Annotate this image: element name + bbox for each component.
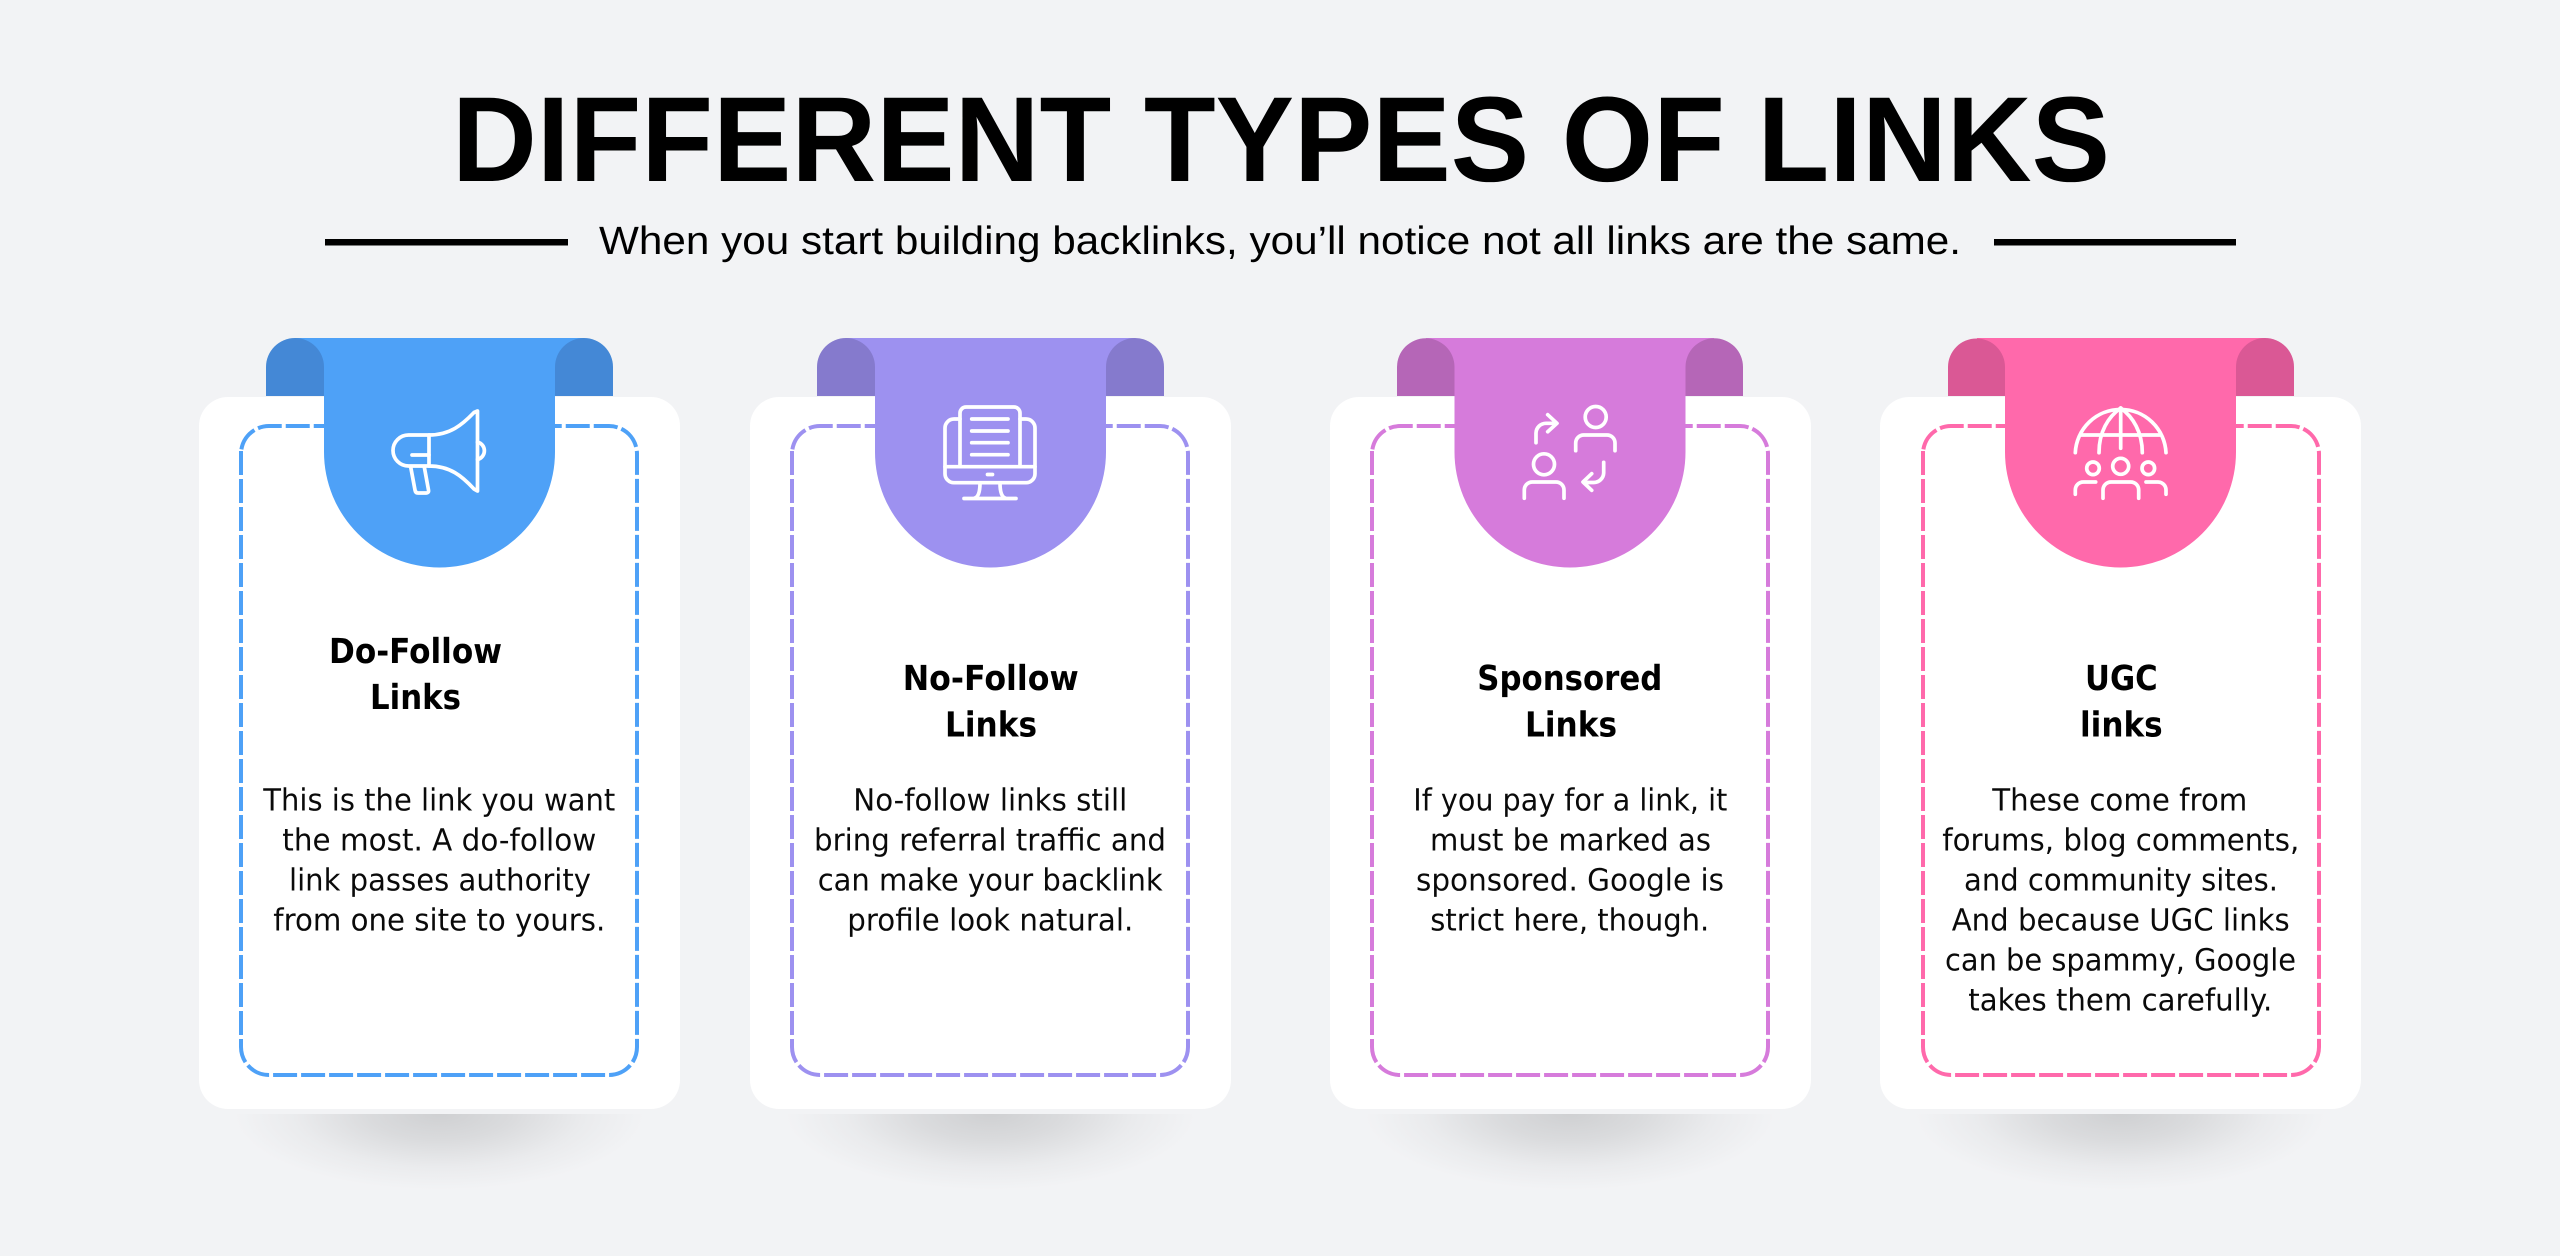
dashed border [241,426,637,1075]
description: can be spammy, Google [1945,944,2296,978]
heading [903,659,1079,746]
description: No-follow links still [853,784,1127,818]
panel: do-follow links [199,338,680,1190]
description: forums, blog comments, [1942,824,2299,858]
heading: UGC [2085,659,2158,699]
ribbon tab [1397,338,1743,568]
card background [750,397,1231,1109]
title: DIFFERENT TYPES OF LINKS [452,71,2110,207]
description: can make your backlink [818,864,1163,898]
heading: Sponsored [1477,659,1662,699]
description: And because UGC links [1952,904,2290,938]
description: and community sites. [1964,864,2278,898]
description: must be marked as [1430,824,1711,858]
icon: globe and community [2075,408,2166,498]
card background [1330,397,1811,1109]
description: strict here, though. [1430,904,1709,938]
dashed border [792,426,1188,1075]
dashed border [1923,426,2319,1075]
icon: people exchanging [1524,406,1615,498]
description: These come from [1991,784,2247,818]
description: sponsored. Google is [1416,864,1724,898]
description [1942,784,2299,1018]
panel: ugc links [1880,338,2361,1190]
card background [1880,397,2361,1109]
subtitle with side rules [325,219,2236,263]
dashed border [1372,426,1768,1075]
description: This is the link you want [262,784,615,818]
heading: Do-Follow [329,632,502,672]
description [262,784,615,938]
description: If you pay for a link, it [1413,784,1727,818]
heading [329,632,502,718]
heading [2080,659,2163,746]
icon: megaphone [393,411,484,493]
heading: Links [945,706,1037,746]
description: the most. A do-follow [282,824,596,858]
icon: computer monitor with document [945,407,1035,498]
heading: links [2080,706,2163,746]
description [814,784,1166,938]
ribbon tab [1948,338,2294,568]
description: from one site to yours. [273,904,605,938]
panel: sponsored links [1330,338,1811,1190]
heading: Links [1525,706,1617,746]
description: takes them carefully. [1968,984,2272,1018]
heading: Links [370,678,461,718]
ribbon tab [817,338,1164,568]
description: profile look natural. [847,904,1133,938]
heading [1477,659,1662,746]
heading: No-Follow [903,659,1079,699]
description: bring referral traffic and [814,824,1166,858]
description [1413,784,1727,938]
panel: no-follow links [750,338,1231,1190]
subtitle with side rules: When you start building backlinks, you’ll notice not all links are the same. [599,219,1961,263]
ribbon tab [266,338,613,568]
description: link passes authority [289,864,591,898]
card background [199,397,680,1109]
